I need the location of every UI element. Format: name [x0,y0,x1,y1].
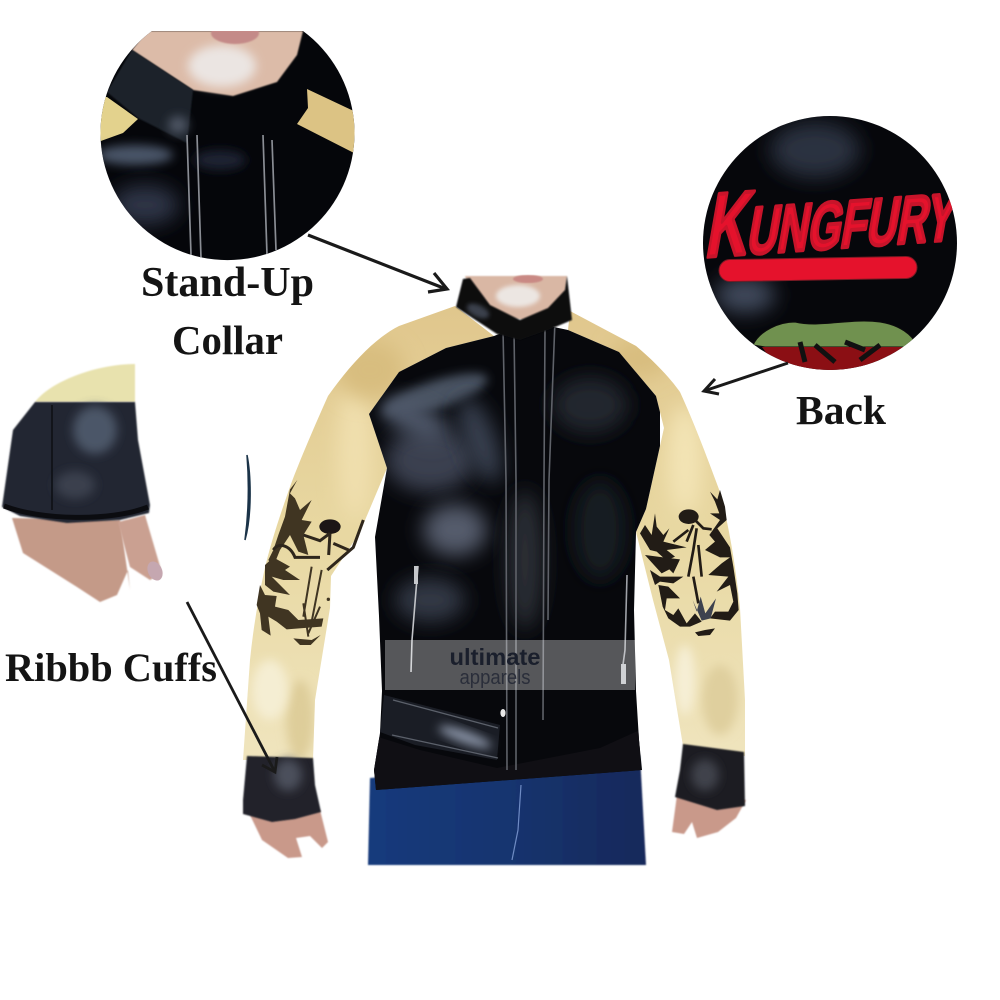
tattoo: right sleeve [640,490,739,636]
cuff left highlight [274,759,302,791]
cuff: left [243,756,321,822]
neck and chin [465,276,567,320]
pocket highlight [437,722,493,752]
emblem marks [800,342,880,362]
lips [210,31,260,45]
red underline bar [719,256,917,282]
arrow: collar [308,235,447,292]
tattoo: left sleeve [257,480,363,645]
cream shoulder right [297,89,358,155]
leather shine left [715,277,775,313]
zip pull: left [414,566,418,584]
black tee hem [372,730,640,795]
watermark logo: apparels [460,667,530,689]
thumbnail [144,559,166,583]
Kung Fury lettering: KUNGFURY [700,158,967,277]
cuff hem [4,506,148,517]
circle remnant sliver [245,455,250,540]
inset: stand-up collar circle [95,22,360,265]
thumb [118,515,162,580]
photo: jacket model [240,275,760,865]
collar highlight [168,116,188,134]
jeans fly seam [512,785,521,860]
cuff right highlight [691,759,719,791]
label: collar: Collar [172,317,283,363]
zip pull: right [621,664,626,684]
label: back: Back [796,387,887,433]
hand: right [672,795,746,838]
chin stubble [496,285,540,307]
chest shine lower [111,185,179,225]
inset: ribbed cuff [2,364,166,602]
lips [513,275,543,283]
skin [132,31,303,96]
leather shading [377,365,628,630]
collar panel [107,50,193,143]
jeans [368,755,646,865]
watermark logo [450,644,540,689]
cream sleeve [35,364,135,402]
label: stand-up: Stand-Up [141,260,314,306]
arrow: back [704,363,788,394]
right sleeve [568,311,745,756]
snap button [500,709,506,717]
cuff shine [73,406,117,454]
leather shine top [770,122,860,178]
chest shine center [194,150,246,170]
cuff: right [675,744,745,810]
chest shine left [97,145,173,165]
stubble [188,45,256,87]
arrow: cuffs [187,602,277,772]
placket lines [187,135,276,258]
inset: back logo circle [700,112,967,374]
cuff leather [2,402,150,523]
zip: right pocket [622,575,627,672]
collar highlight [465,300,491,322]
jacket body [360,310,660,800]
label: ribbb cuffs: Ribbb Cuffs [5,645,217,690]
green emblem [753,321,917,347]
cream shoulder left [98,97,138,142]
watermark band [385,640,635,690]
left sleeve [240,300,500,770]
lower pocket panel [380,695,500,760]
cuff seam [51,405,53,510]
watermark logo: ultimate [450,644,540,670]
collar [456,276,572,340]
red emblem [762,347,903,370]
zip: left pocket [411,566,418,672]
hand [12,518,130,602]
hand: left [250,810,328,858]
cuff shine lower [55,471,95,499]
placket trim lines [503,320,555,770]
